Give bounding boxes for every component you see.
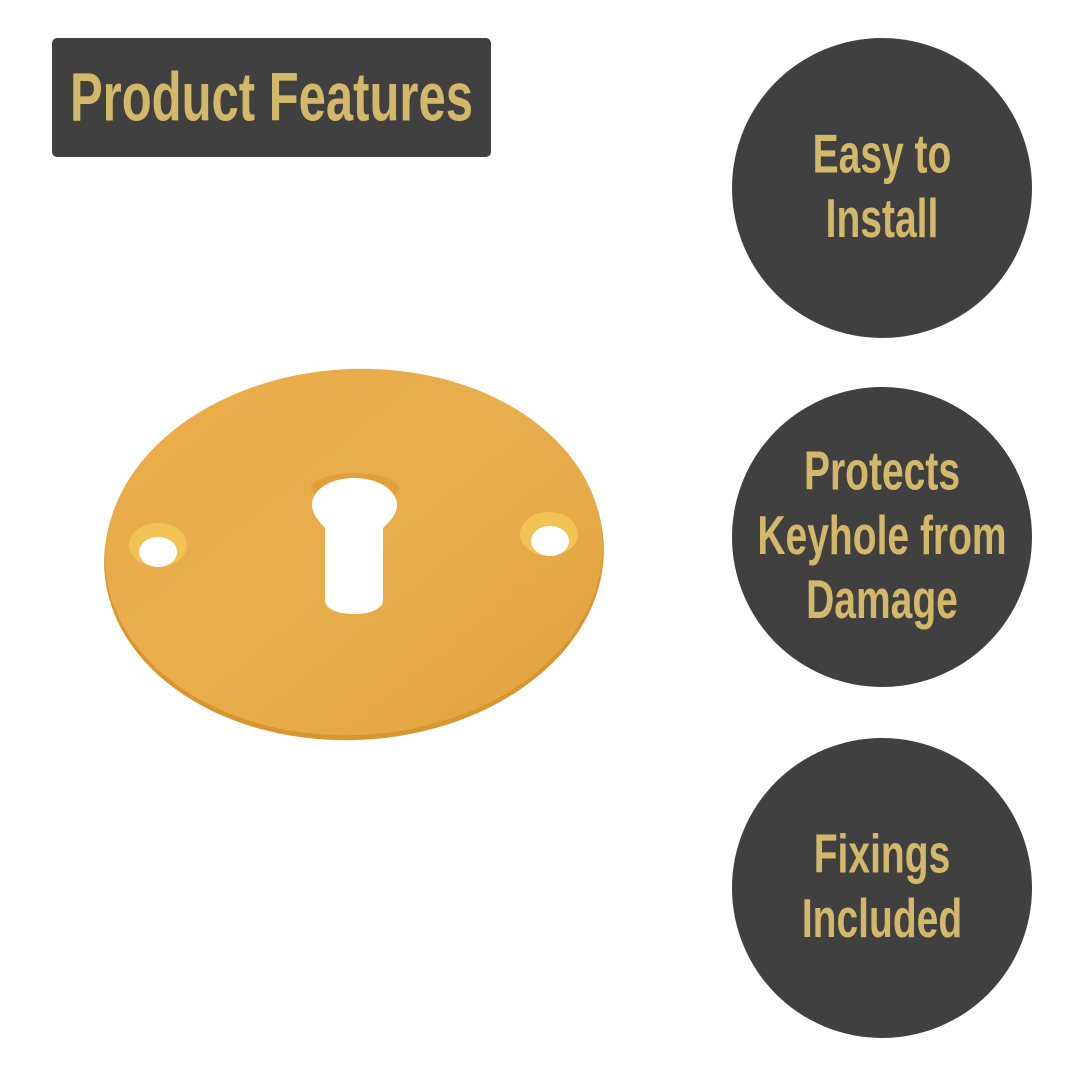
feature circle: fixings included: Fixings [814,825,950,885]
feature circle: easy to install: Install [826,189,938,250]
title: Product Features [70,60,473,135]
product image: brass escutcheon [104,368,604,740]
feature circle: protects keyhole [732,387,1032,687]
feature circle: easy to install [732,38,1032,338]
screw hole right [520,512,578,556]
feature circle: fixings included: Included [802,889,962,950]
feature circle: protects keyhole: Protects [804,442,960,502]
title [52,38,491,157]
feature circle: easy to install: Easy to [813,125,951,185]
keyhole [311,473,399,614]
screw hole left [129,523,187,567]
feature circle: protects keyhole: Damage [806,571,958,631]
feature circle: protects keyhole: Keyhole from [757,506,1007,566]
feature circle: fixings included [732,738,1032,1038]
